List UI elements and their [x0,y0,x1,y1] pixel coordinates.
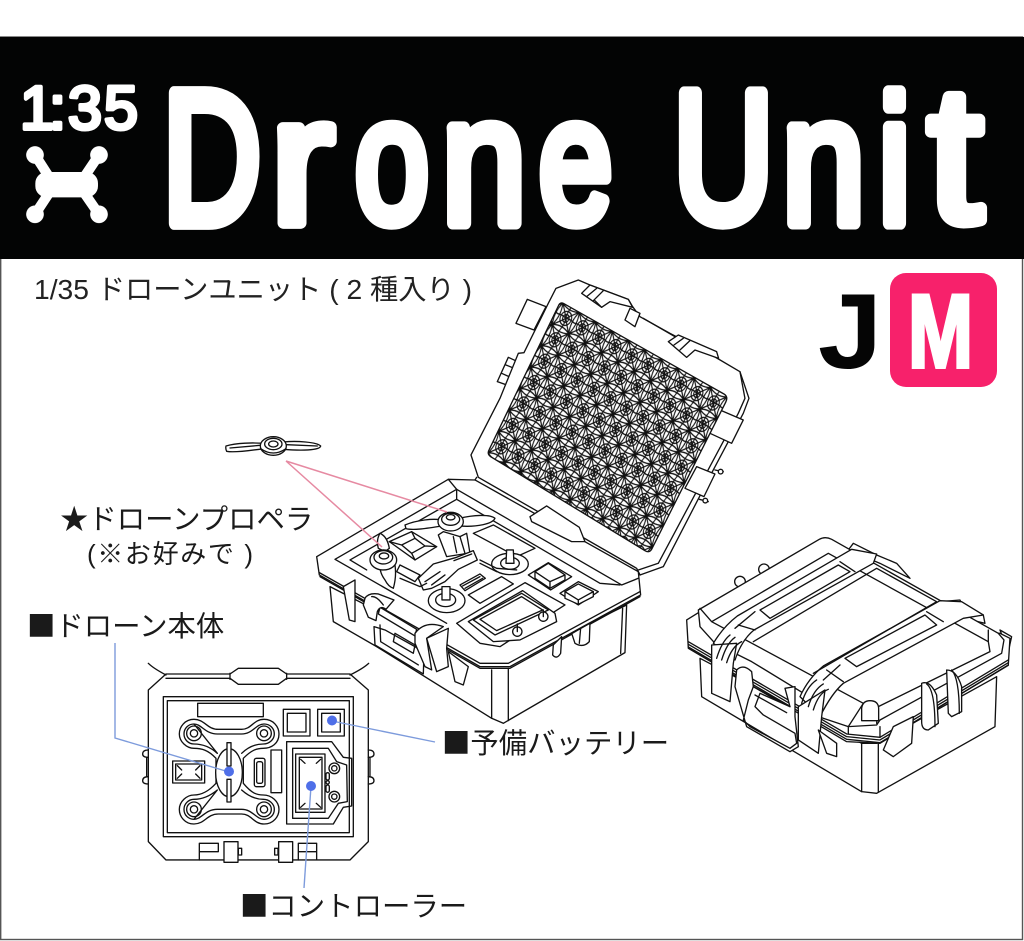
pointer: controller [304,781,316,888]
label: propeller [60,497,313,569]
handle [374,607,424,674]
pointer: drone body [115,643,234,776]
title: Drone Unit: o [355,62,429,259]
strap rear [713,549,877,660]
subtitle: 1/35 ドローンユニット ( 2 種入り ) [34,274,472,305]
title: Drone Unit: t [928,48,982,263]
handle [735,667,798,752]
label: propeller: ★ドローンプロペラ [60,497,313,538]
title: Drone Unit [163,48,982,263]
controller [468,591,557,642]
label: controller: ■コントローラー [240,884,467,925]
lower rim [317,479,641,667]
buckle front [798,680,837,757]
icon: drone logo [26,146,108,223]
drone recess [173,719,279,824]
clasps [883,670,962,757]
header band [0,37,1024,259]
label: propeller: (※お好みで ) [87,539,253,569]
strap front [800,601,983,717]
label: drone body: ■ドローン本体 [27,604,224,645]
lower latches [199,842,317,862]
lid [471,280,749,575]
rim edges [319,477,640,668]
pointer lines: propeller [286,461,447,547]
buckle rear [712,635,742,702]
illustration: open case [317,280,749,723]
icon: loose propeller [226,437,321,455]
illustration: top view of tray [143,663,374,862]
title: Drone Unit: r [270,61,334,262]
scale label 1:35: 1:35 [20,74,138,142]
logo: JM: J [818,271,882,391]
logo: JM [818,271,997,391]
illustration: closed case [687,538,1012,793]
drone in tray [370,512,528,613]
pointer: battery [327,716,435,742]
title: Drone Unit: n [782,61,865,261]
controller recess [287,742,352,824]
foam liner [488,303,727,552]
center panel [753,568,937,673]
label: battery: ■予備バッテリー [442,721,669,762]
title: Drone Unit: U [673,52,774,261]
lid top [698,538,1004,737]
rim [687,612,1010,743]
body [700,658,997,793]
hinge knobs [735,543,1012,652]
compartments [198,703,344,793]
case body [330,587,627,723]
hinge tab [530,506,585,542]
logo: JM: M [908,274,973,390]
title: Drone Unit: n [442,62,526,262]
title: Drone Unit: e [539,61,612,259]
title: Drone Unit: i [878,59,910,262]
case outline [143,663,374,860]
latches on front [343,580,590,685]
compartments [389,525,598,647]
title: Drone Unit: D [163,52,261,263]
